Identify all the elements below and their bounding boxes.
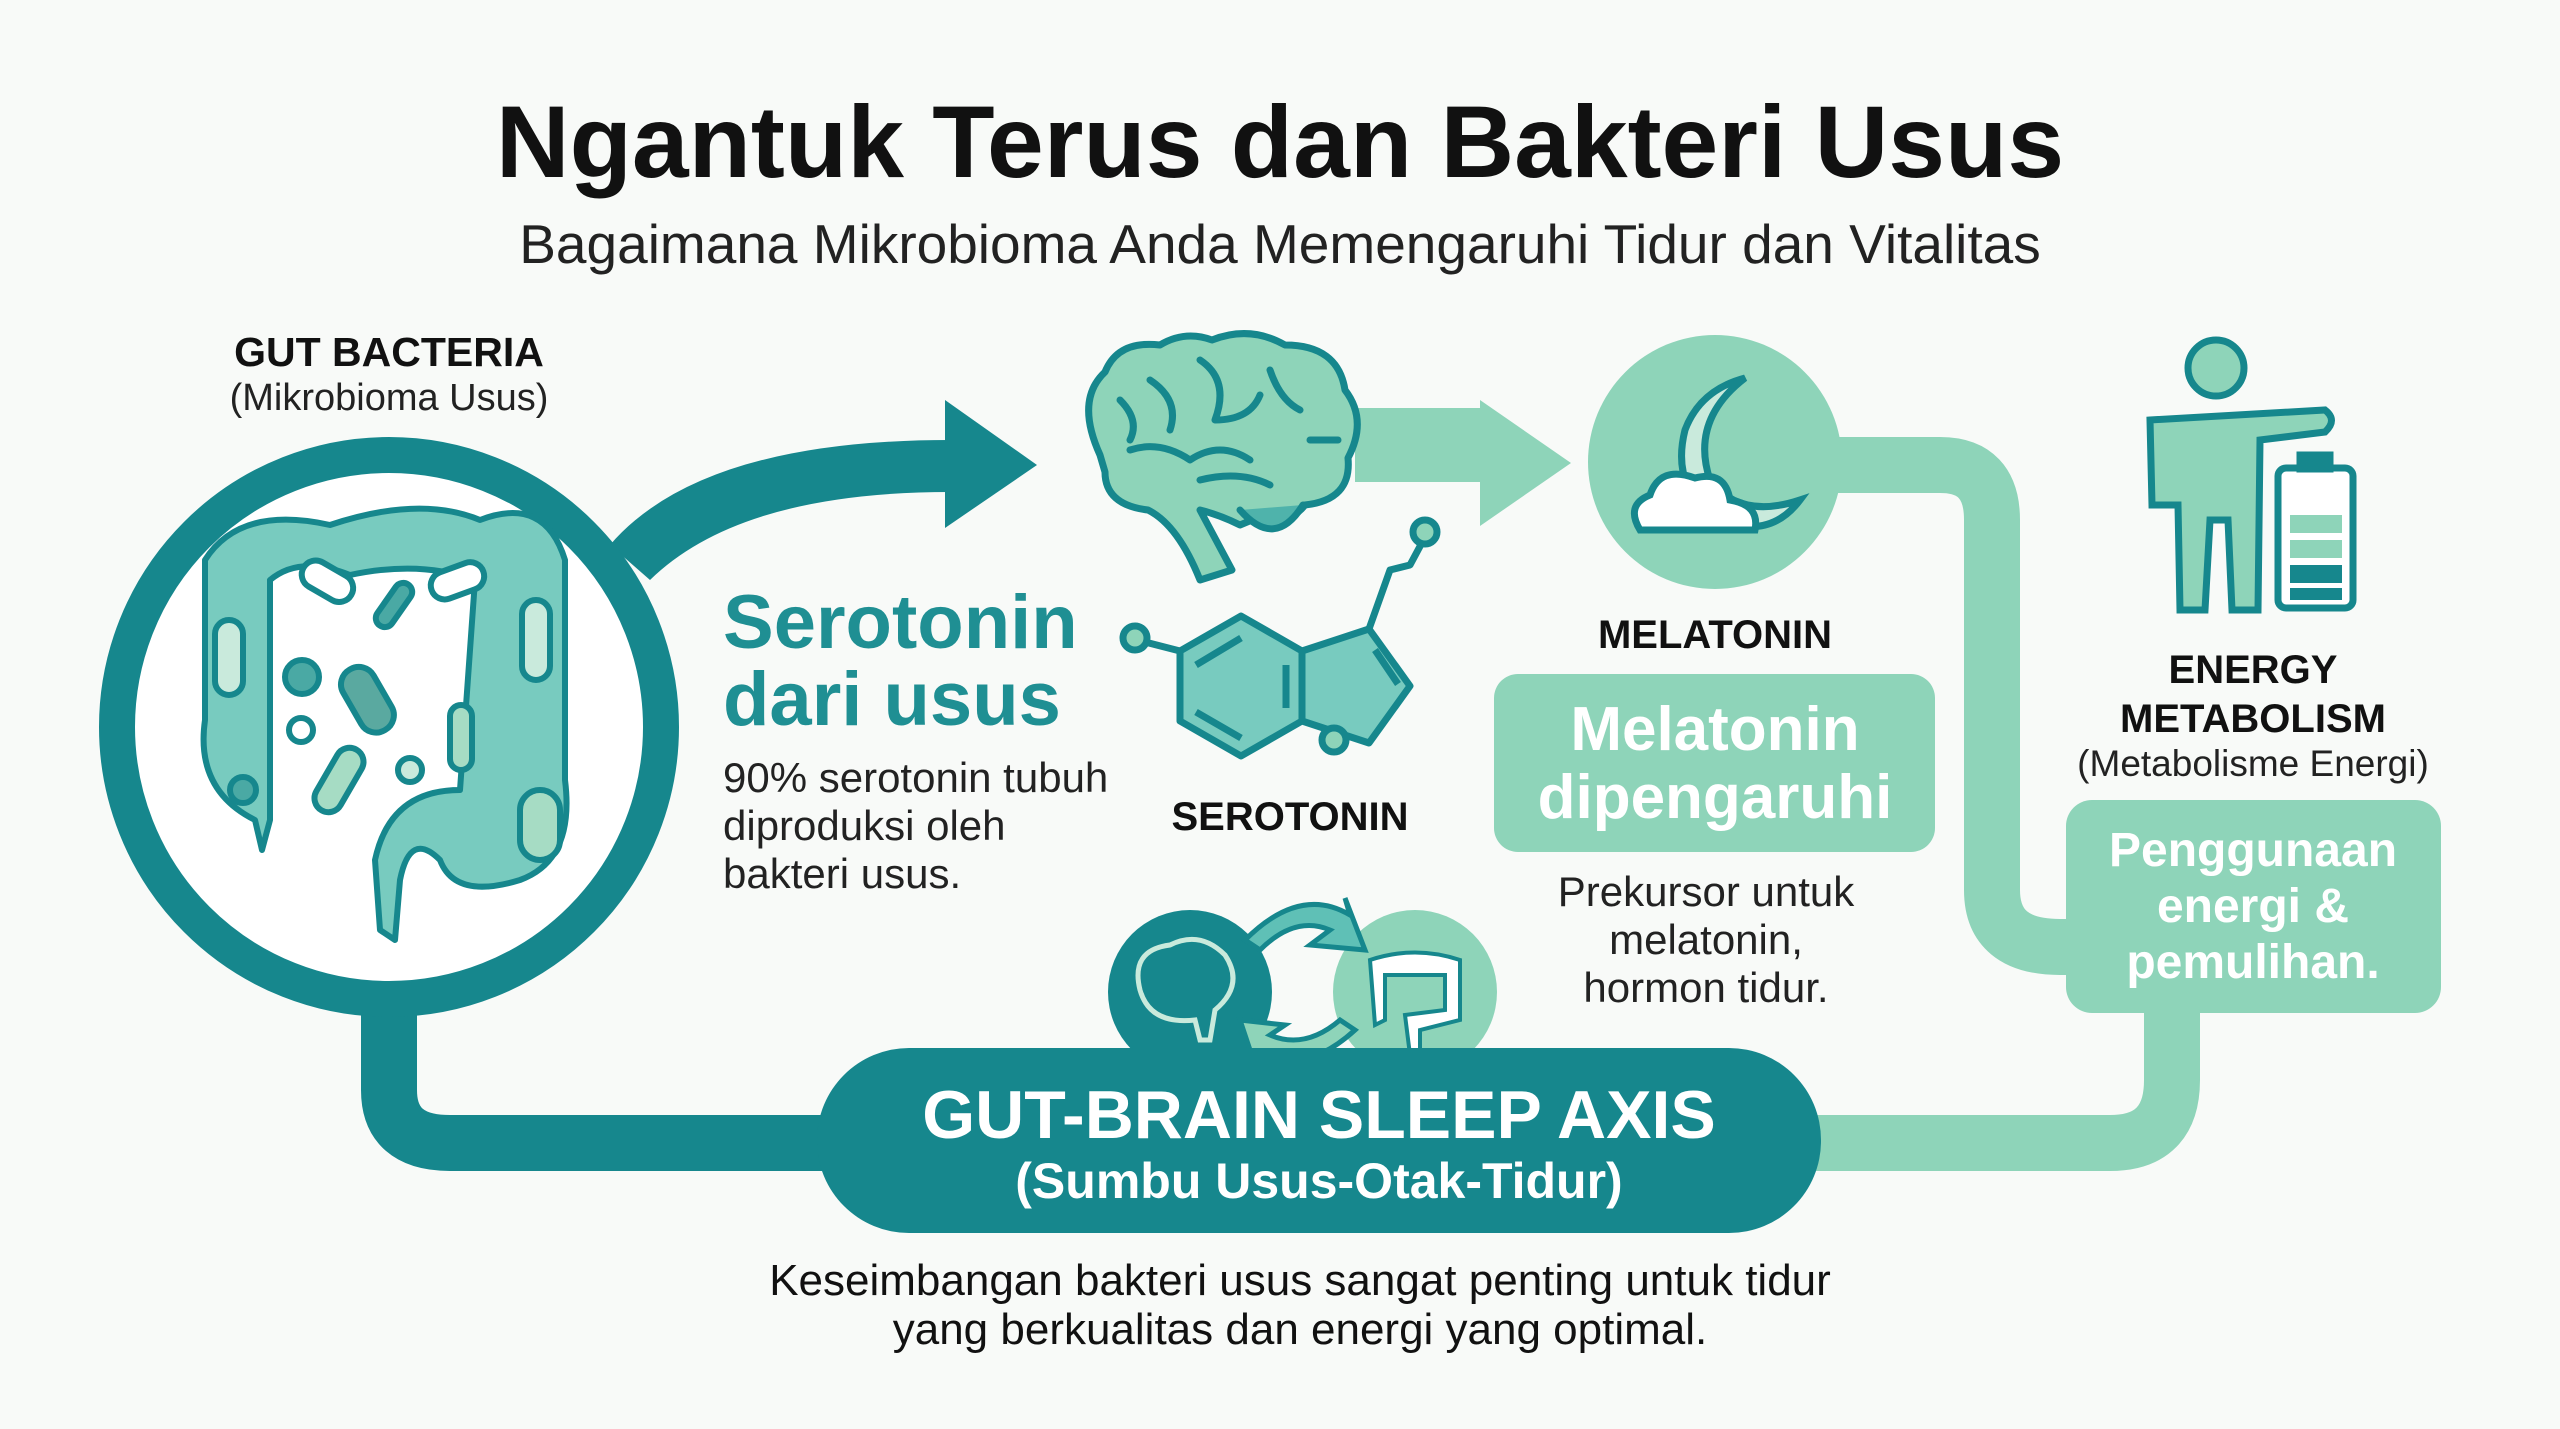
icon: melatonin moon circle xyxy=(1588,335,1842,589)
connector: dark bottom loop xyxy=(389,1000,860,1143)
icon: intestine with bacteria xyxy=(204,509,567,940)
box: penggunaan energi xyxy=(2066,800,2441,1013)
text block: serotonin dari usus: dari usus xyxy=(723,657,1061,742)
label: energy metabolism xyxy=(2077,648,2429,784)
text block: serotonin dari usus: 90% serotonin tubuh xyxy=(723,754,1108,801)
text block: serotonin dari usus xyxy=(723,580,1108,897)
icon: serotonin molecule xyxy=(1123,520,1437,756)
footer text: yang berkualitas dan energi yang optimal. xyxy=(893,1305,1707,1354)
box: penggunaan energi: Penggunaan xyxy=(2109,824,2397,877)
circle frame xyxy=(117,455,661,999)
connector: light top-right path xyxy=(1800,465,2080,947)
text: prekursor: hormon tidur. xyxy=(1583,964,1829,1011)
icon: person with battery xyxy=(2150,340,2353,610)
box: melatonin dipengaruhi xyxy=(1494,674,1935,852)
box: penggunaan energi: pemulihan. xyxy=(2126,936,2380,989)
footer text: Keseimbangan bakteri usus sangat penting untuk tidur xyxy=(769,1256,1831,1305)
title: Ngantuk Terus dan Bakteri Usus xyxy=(496,85,2064,199)
text: prekursor: Prekursor untuk xyxy=(1558,868,1855,915)
arrow: brain to melatonin xyxy=(1355,400,1571,526)
label: melatonin: MELATONIN xyxy=(1598,613,1832,657)
box: penggunaan energi: energi & xyxy=(2157,880,2349,933)
text block: serotonin dari usus: diproduksi oleh xyxy=(723,802,1006,849)
pill: gut-brain sleep axis xyxy=(817,1048,1821,1233)
panel: gut bacteria xyxy=(117,329,661,999)
footer text xyxy=(769,1256,1831,1354)
pill: gut-brain sleep axis: (Sumbu Usus-Otak-Tidur) xyxy=(1015,1153,1623,1209)
box: melatonin dipengaruhi: Melatonin xyxy=(1570,695,1860,764)
label: serotonin: SEROTONIN xyxy=(1171,795,1409,839)
label: energy metabolism: ENERGY xyxy=(2169,648,2338,692)
pill: gut-brain sleep axis: GUT-BRAIN SLEEP AXIS xyxy=(922,1077,1716,1153)
icon: brain-gut cycle xyxy=(1108,898,1497,1074)
label: energy metabolism: METABOLISM xyxy=(2120,697,2386,741)
text block: serotonin dari usus: Serotonin xyxy=(723,580,1078,665)
connector: light bottom-right path xyxy=(1800,1000,2172,1143)
arrow: gut to brain xyxy=(610,400,1037,580)
box: melatonin dipengaruhi: dipengaruhi xyxy=(1538,763,1892,832)
text: prekursor: melatonin, xyxy=(1609,916,1803,963)
label: energy metabolism: (Metabolisme Energi) xyxy=(2077,743,2429,784)
text block: serotonin dari usus: bakteri usus. xyxy=(723,850,961,897)
icon: brain xyxy=(1089,334,1357,580)
heading: gut bacteria: GUT BACTERIA xyxy=(234,329,544,375)
subheading: (Mikrobioma Usus) xyxy=(230,377,548,419)
subtitle: Bagaimana Mikrobioma Anda Memengaruhi Tidur dan Vitalitas xyxy=(519,213,2041,275)
